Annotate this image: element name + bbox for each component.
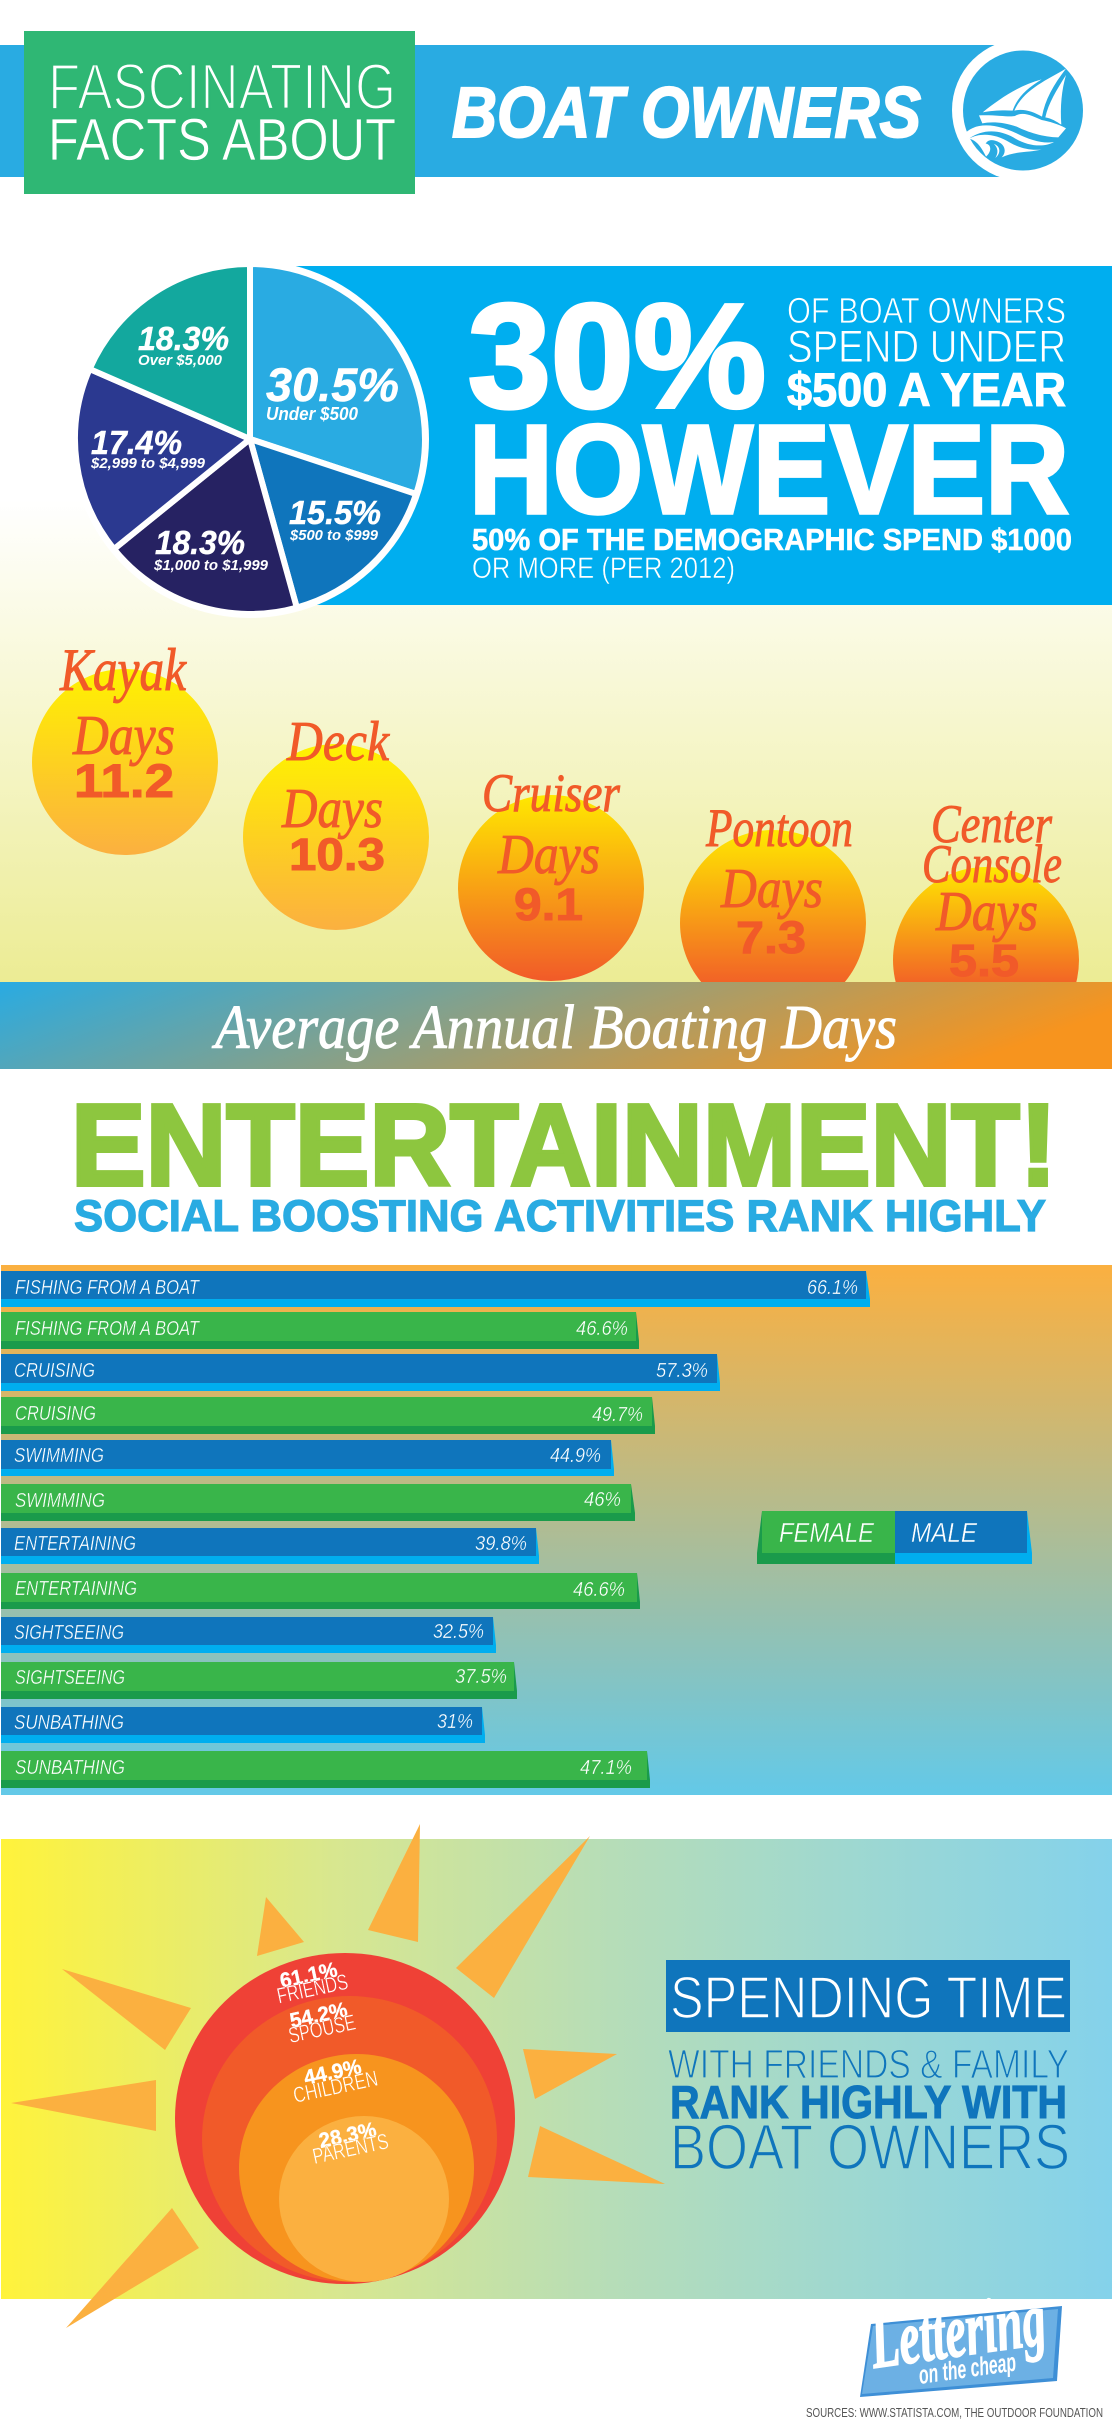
- bar: sightseeing male: [1, 1617, 496, 1653]
- bubble: kayak: [32, 637, 218, 855]
- pie chart: annual spending: 15.5%: [289, 494, 381, 531]
- bubble: deck: Deck: [286, 711, 390, 773]
- header banner: [0, 39, 1094, 181]
- bar: sightseeing female: SIGHTSEEING: [15, 1666, 125, 1689]
- text: with friends and family rank highly with boat owners: RANK HIGHLY WITH: [670, 2076, 1067, 2128]
- text: 50 percent demographic: [472, 522, 1072, 585]
- bar: sightseeing female: 37.5%: [455, 1665, 507, 1688]
- chart: nested sun circles: 54.2%: [288, 1998, 350, 2033]
- pie chart: annual spending: $2,999 to $4,999: [90, 455, 206, 472]
- bar: cruising male: [1, 1354, 720, 1391]
- bubble: deck: 10.3: [289, 829, 385, 880]
- legend: female and male: MALE: [911, 1517, 977, 1548]
- bar: fishing male: [1, 1271, 870, 1307]
- heading: however: HOWEVER: [469, 399, 1069, 540]
- text: of boat owners spend under 500 a year: $500 A YEAR: [787, 363, 1066, 416]
- bubble: pontoon: 7.3: [736, 912, 806, 963]
- bar: swimming male: 44.9%: [550, 1444, 601, 1467]
- bubble: kayak: 11.2: [74, 754, 174, 807]
- logo: lettering on the cheap: [860, 2277, 1062, 2397]
- bar: entertaining female: ENTERTAINING: [15, 1577, 137, 1600]
- subheading: social boosting activities: SOCIAL BOOSTING ACTIVITIES RANK HIGHLY: [74, 1192, 1046, 1241]
- band: average annual boating days: Average Annual Boating Days: [211, 994, 897, 1062]
- pie chart: annual spending: $1,000 to $1,999: [153, 557, 269, 574]
- chart: nested sun circles: FRIENDS: [275, 1969, 350, 2008]
- text: of boat owners spend under 500 a year: [787, 290, 1066, 416]
- bar: sightseeing male: SIGHTSEEING: [14, 1621, 124, 1644]
- chart: nested sun circles: 44.9%: [302, 2055, 364, 2090]
- bubble: cruiser: Days: [497, 824, 600, 886]
- bar: cruising male: CRUISING: [14, 1359, 95, 1382]
- bar: sunbathing male: 31%: [437, 1710, 473, 1733]
- text: of boat owners spend under 500 a year: SPEND UNDER: [787, 321, 1066, 372]
- bar: fishing female: 46.6%: [576, 1317, 628, 1340]
- pie chart: annual spending: Over $5,000: [138, 352, 223, 369]
- big number 30%: 30%: [468, 274, 766, 439]
- panel background: spending time: [1, 1839, 1112, 2299]
- text: 50 percent demographic: 50% OF THE DEMOGRAPHIC SPEND $1000: [472, 522, 1072, 557]
- pie chart: annual spending: [71, 260, 429, 618]
- band: average annual boating days: [0, 982, 1112, 1069]
- bar: entertaining male: [1, 1528, 539, 1564]
- logo: lettering on the cheap: on the cheap: [917, 2347, 1018, 2390]
- bar: swimming female: [1, 1484, 635, 1521]
- legend: female and male: [757, 1511, 1032, 1564]
- chart: nested sun circles: [175, 1953, 515, 2284]
- pie chart: annual spending: 18.3%: [138, 320, 229, 357]
- title box: fascinating facts about: FASCINATING: [48, 50, 396, 123]
- heading: entertainment: ENTERTAINMENT!: [71, 1080, 1057, 1210]
- title box: fascinating facts about: [24, 31, 415, 194]
- chart: nested sun circles: CHILDREN: [291, 2065, 380, 2108]
- bubble: center console: Center: [931, 794, 1053, 854]
- pie chart: annual spending: 18.3%: [155, 524, 245, 561]
- bar: sunbathing female: 47.1%: [580, 1756, 632, 1779]
- bubble: cruiser: [458, 763, 644, 981]
- panel: spending headline: [250, 266, 1112, 605]
- bar: sunbathing male: [1, 1707, 485, 1743]
- pale gradient background: boating days: [0, 500, 1112, 982]
- bar: sightseeing male: 32.5%: [433, 1620, 484, 1643]
- chart: nested sun circles: SPOUSE: [286, 2009, 358, 2048]
- bubble: deck: [243, 711, 429, 930]
- text: of boat owners spend under 500 a year: OF BOAT OWNERS: [787, 290, 1066, 331]
- bar: fishing male: FISHING FROM A BOAT: [15, 1276, 200, 1299]
- icon: boat badge: [952, 39, 1094, 181]
- chart: nested sun circles: PARENTS: [310, 2128, 391, 2169]
- title: boat owners: BOAT OWNERS: [452, 74, 921, 153]
- panel: activities bar chart: [1, 1265, 1112, 1795]
- bar: cruising female: 49.7%: [592, 1403, 643, 1426]
- bar: sunbathing female: [1, 1751, 650, 1788]
- bubble: center console: Console: [922, 834, 1062, 894]
- bar: fishing female: [1, 1312, 639, 1349]
- bar: sunbathing male: SUNBATHING: [14, 1711, 124, 1734]
- bar: sightseeing female: [1, 1662, 517, 1699]
- bar: cruising male: 57.3%: [656, 1359, 708, 1382]
- pie chart: annual spending: $500 to $999: [289, 527, 379, 544]
- bar: sunbathing female: SUNBATHING: [15, 1756, 125, 1779]
- text: 50 percent demographic: OR MORE (PER 2012): [472, 552, 735, 585]
- pie chart: annual spending: Under $500: [266, 404, 358, 424]
- title box: fascinating facts about: FACTS ABOUT: [48, 107, 396, 173]
- chart: nested sun circles: 61.1%: [278, 1958, 340, 1993]
- pie chart: annual spending: 30.5%: [266, 358, 399, 411]
- bar: swimming female: 46%: [584, 1488, 621, 1511]
- bar: fishing male: 66.1%: [807, 1276, 858, 1299]
- bubble: cruiser: Cruiser: [482, 763, 621, 823]
- bar: entertaining male: ENTERTAINING: [14, 1532, 136, 1555]
- pie chart: annual spending: 17.4%: [91, 424, 182, 461]
- icon: sun rays: [11, 1824, 665, 2328]
- bar: fishing female: FISHING FROM A BOAT: [15, 1317, 200, 1340]
- bubble: center console: [893, 794, 1079, 1053]
- bar: entertaining male: 39.8%: [475, 1532, 527, 1555]
- bubble: kayak: Days: [72, 705, 175, 767]
- bubble: cruiser: 9.1: [514, 879, 583, 930]
- bubble: pontoon: Days: [720, 858, 823, 920]
- text: with friends and family rank highly with boat owners: [668, 2041, 1070, 2183]
- bubble: pontoon: [680, 798, 866, 1016]
- bar: cruising female: CRUISING: [15, 1402, 96, 1425]
- bar: swimming male: [1, 1440, 614, 1476]
- chart: nested sun circles: 28.3%: [317, 2118, 379, 2153]
- bubble: center console: 5.5: [949, 935, 1019, 986]
- bar: cruising female: [1, 1397, 655, 1434]
- bar: swimming female: SWIMMING: [15, 1489, 105, 1512]
- bar: entertaining female: 46.6%: [573, 1578, 625, 1601]
- bubble: center console: Days: [935, 881, 1038, 943]
- bar: entertaining female: [1, 1573, 640, 1609]
- bubble: deck: Days: [281, 778, 383, 840]
- bubble: kayak: Kayak: [59, 637, 187, 703]
- bubble: pontoon: Pontoon: [705, 798, 853, 858]
- bar: swimming male: SWIMMING: [14, 1444, 104, 1467]
- legend: female and male: FEMALE: [779, 1517, 874, 1548]
